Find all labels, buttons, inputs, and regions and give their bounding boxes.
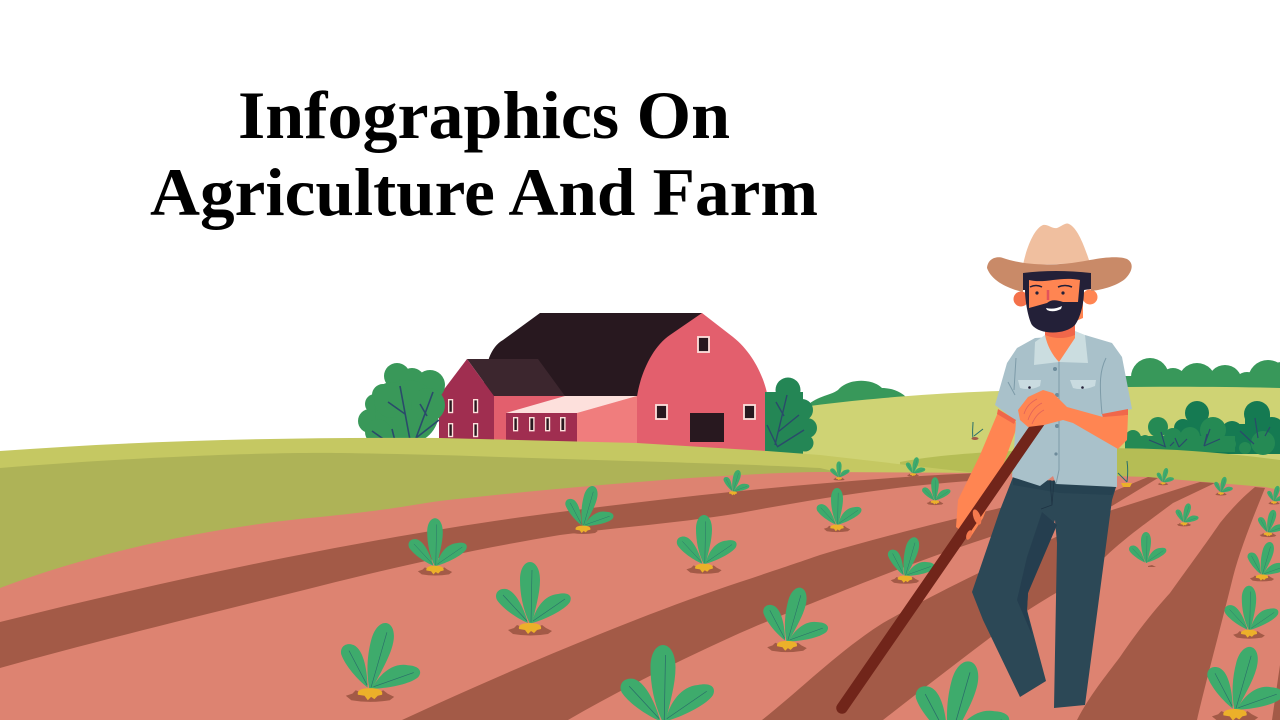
hat	[987, 223, 1132, 292]
side house	[439, 359, 494, 445]
pockets	[1018, 380, 1041, 389]
foreground hill dark	[0, 453, 880, 640]
furrows	[0, 472, 1280, 720]
lower right hill	[900, 448, 1280, 520]
annex front	[506, 413, 577, 450]
barn front	[637, 313, 767, 456]
shirt	[995, 331, 1132, 487]
side house windows	[449, 400, 478, 436]
background bush behind barn	[805, 381, 910, 420]
back hill	[770, 387, 1280, 490]
sleeve cuffs	[997, 409, 1016, 424]
smile	[1046, 306, 1062, 311]
barn dark roof	[480, 313, 702, 400]
sprout on right hill	[1118, 461, 1132, 487]
annex light wall	[577, 396, 637, 450]
eyes and brows	[1030, 286, 1072, 300]
connecting wall	[494, 396, 640, 450]
title: Agriculture And Farm	[150, 154, 818, 230]
annex windows	[514, 418, 565, 431]
barn door	[690, 413, 724, 442]
beard and hair	[1023, 268, 1091, 332]
tree left of barn	[358, 363, 445, 445]
neck	[1045, 325, 1075, 362]
foreground hill light	[0, 438, 985, 640]
farmer	[842, 223, 1132, 708]
buttons	[1053, 367, 1059, 456]
trousers	[972, 477, 1116, 708]
bushes right	[1125, 401, 1280, 455]
lower hand fingers	[966, 509, 982, 540]
face	[1029, 278, 1083, 320]
right arm and hand	[1018, 390, 1128, 449]
side house roof	[467, 359, 565, 396]
background tree line right	[1125, 358, 1280, 402]
title: Infographics On	[238, 77, 730, 153]
barn	[439, 313, 767, 456]
sprout on back hill	[972, 422, 983, 440]
field	[0, 472, 1280, 720]
finger lines	[1024, 399, 1044, 424]
annex roof	[506, 396, 637, 413]
hoe stick	[842, 421, 1040, 708]
ears	[1014, 292, 1026, 306]
barn windows	[656, 337, 755, 419]
collar	[1034, 335, 1059, 365]
tree right of barn	[765, 378, 817, 454]
crop plants	[333, 455, 1280, 720]
title	[150, 77, 818, 230]
left arm	[956, 410, 1018, 538]
